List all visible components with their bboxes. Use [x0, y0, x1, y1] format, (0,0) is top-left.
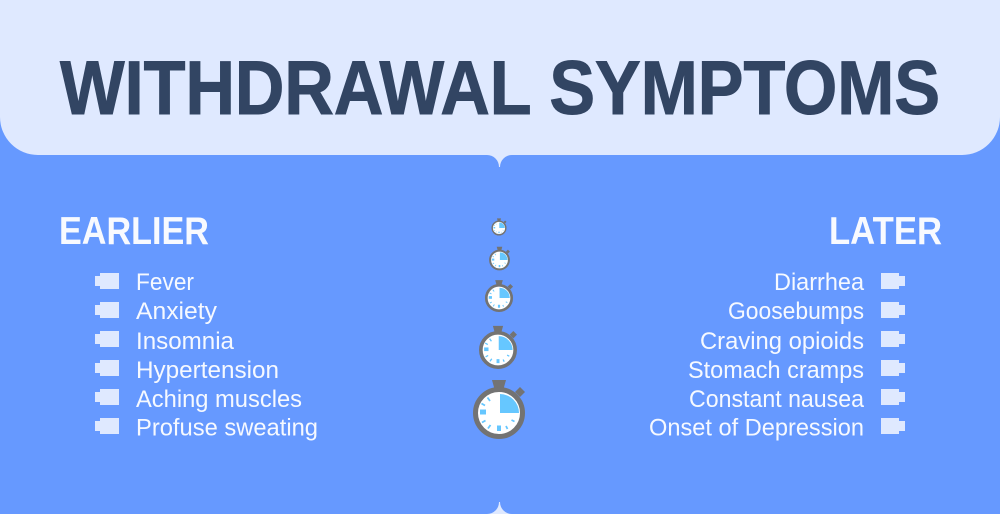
list item: diarrhea: Diarrhea: [774, 269, 865, 296]
list item: onset of depression: Onset of Depression: [649, 414, 864, 442]
bottom pointer: [487, 502, 512, 514]
list item: profuse sweating: Profuse sweating: [136, 414, 318, 442]
panel: later symptoms: [649, 210, 942, 442]
list item: craving opioids: Craving opioids: [700, 328, 864, 355]
list item: insomnia: Insomnia: [136, 328, 235, 355]
panel: earlier symptoms: [59, 210, 318, 442]
list item: insomnia: [95, 328, 235, 355]
list item: goosebumps: Goosebumps: [728, 298, 864, 325]
stopwatch column: [476, 218, 525, 436]
icon: stopwatch 1: [492, 218, 507, 235]
heading: later: LATER: [829, 210, 942, 253]
icon: stopwatch 5: [476, 380, 525, 436]
list item: fever: [95, 269, 194, 296]
list item: aching muscles: Aching muscles: [136, 386, 302, 413]
icon: stopwatch 4: [481, 326, 517, 367]
list item: constant nausea: Constant nausea: [689, 386, 865, 413]
heading: earlier: EARLIER: [59, 210, 209, 253]
list item: stomach cramps: Stomach cramps: [688, 357, 864, 384]
list item: anxiety: Anxiety: [136, 298, 217, 325]
list item: anxiety: [95, 298, 217, 325]
icon: stopwatch 2: [490, 247, 510, 269]
list item: hypertension: Hypertension: [136, 357, 279, 384]
header panel with pointer: [0, 0, 1000, 167]
icon: stopwatch 3: [486, 280, 513, 311]
list item: fever: Fever: [136, 269, 194, 296]
